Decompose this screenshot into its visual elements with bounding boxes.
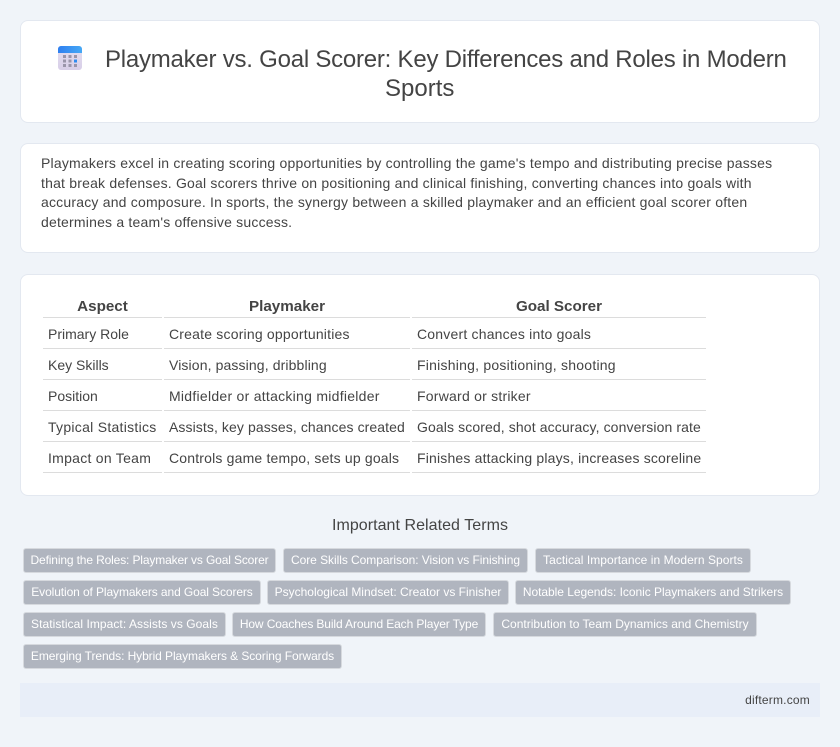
tag bbox=[23, 612, 226, 637]
tag bbox=[232, 612, 486, 637]
tag: Tactical Importance in Modern Sports bbox=[543, 553, 743, 567]
tag bbox=[283, 548, 528, 573]
row: key skills bbox=[48, 357, 616, 373]
tag bbox=[493, 612, 757, 637]
tag: Notable Legends: Iconic Playmakers and Strikers bbox=[523, 585, 783, 599]
row: key skills: Vision, passing, dribbling bbox=[169, 357, 327, 373]
row: typical statistics: Goals scored, shot accuracy, conversion rate bbox=[417, 419, 701, 435]
tag: Psychological Mindset: Creator vs Finisher bbox=[275, 585, 501, 599]
row: impact on team: Controls game tempo, sets up goals bbox=[169, 450, 399, 466]
row: position: Forward or striker bbox=[417, 388, 531, 404]
row: primary role: Primary Role bbox=[48, 326, 129, 342]
related terms heading: Important Related Terms bbox=[332, 517, 508, 534]
row: position: Position bbox=[48, 388, 98, 404]
footer bar bbox=[20, 683, 820, 717]
tag bbox=[23, 644, 342, 669]
row: impact on team: Finishes attacking plays, increases scoreline bbox=[417, 450, 701, 466]
row: key skills: Finishing, positioning, shooting bbox=[417, 357, 616, 373]
row: impact on team bbox=[48, 450, 701, 466]
tag: Statistical Impact: Assists vs Goals bbox=[31, 617, 218, 631]
title bbox=[105, 46, 787, 102]
tag: How Coaches Build Around Each Player Type bbox=[240, 617, 478, 631]
tag: Contribution to Team Dynamics and Chemistry bbox=[501, 617, 749, 631]
tag bbox=[515, 580, 791, 605]
row: typical statistics: Assists, key passes, chances created bbox=[169, 419, 405, 435]
tag: Emerging Trends: Hybrid Playmakers & Scoring Forwards bbox=[31, 649, 334, 663]
row: primary role bbox=[48, 326, 591, 342]
tag: Evolution of Playmakers and Goal Scorers bbox=[31, 585, 253, 599]
icon: calendar bbox=[58, 46, 82, 70]
comparison table panel bbox=[20, 274, 820, 496]
footer source: difterm.com bbox=[745, 693, 810, 707]
row: position bbox=[48, 388, 531, 404]
intro paragraph: accuracy and composure. In sports, the synergy between a skilled playmaker and an efficient goal scorer often bbox=[41, 194, 747, 210]
intro paragraph: Playmakers excel in creating scoring opportunities by controlling the game's tempo and distributing precise passes bbox=[41, 155, 772, 171]
row: position: Midfielder or attacking midfielder bbox=[169, 388, 380, 404]
tag bbox=[535, 548, 751, 573]
row: typical statistics bbox=[48, 419, 701, 435]
intro paragraph: that break defenses. Goal scorers thrive on positioning and clinical finishing, converting chances into goals with bbox=[41, 175, 752, 191]
row: primary role: Create scoring opportunities bbox=[169, 326, 350, 342]
row: impact on team: Impact on Team bbox=[48, 450, 151, 466]
header panel bbox=[20, 20, 820, 123]
tag bbox=[267, 580, 509, 605]
title: Sports bbox=[385, 75, 454, 102]
table header: Aspect bbox=[77, 298, 128, 315]
table header: Goal Scorer bbox=[516, 298, 602, 315]
intro paragraph bbox=[41, 155, 772, 230]
tag bbox=[23, 580, 261, 605]
intro panel bbox=[20, 143, 820, 253]
tag: Defining the Roles: Playmaker vs Goal Scorer bbox=[31, 553, 268, 567]
intro paragraph: determines a team's offensive success. bbox=[41, 214, 292, 230]
table header bbox=[77, 298, 602, 315]
tag: Core Skills Comparison: Vision vs Finishing bbox=[291, 553, 520, 567]
related terms tags bbox=[23, 548, 791, 669]
row: key skills: Key Skills bbox=[48, 357, 109, 373]
row: typical statistics: Typical Statistics bbox=[48, 419, 157, 435]
row: primary role: Convert chances into goals bbox=[417, 326, 591, 342]
table header: Playmaker bbox=[249, 298, 325, 315]
tag bbox=[23, 548, 276, 573]
title: Playmaker vs. Goal Scorer: Key Differences and Roles in Modern bbox=[105, 46, 787, 73]
